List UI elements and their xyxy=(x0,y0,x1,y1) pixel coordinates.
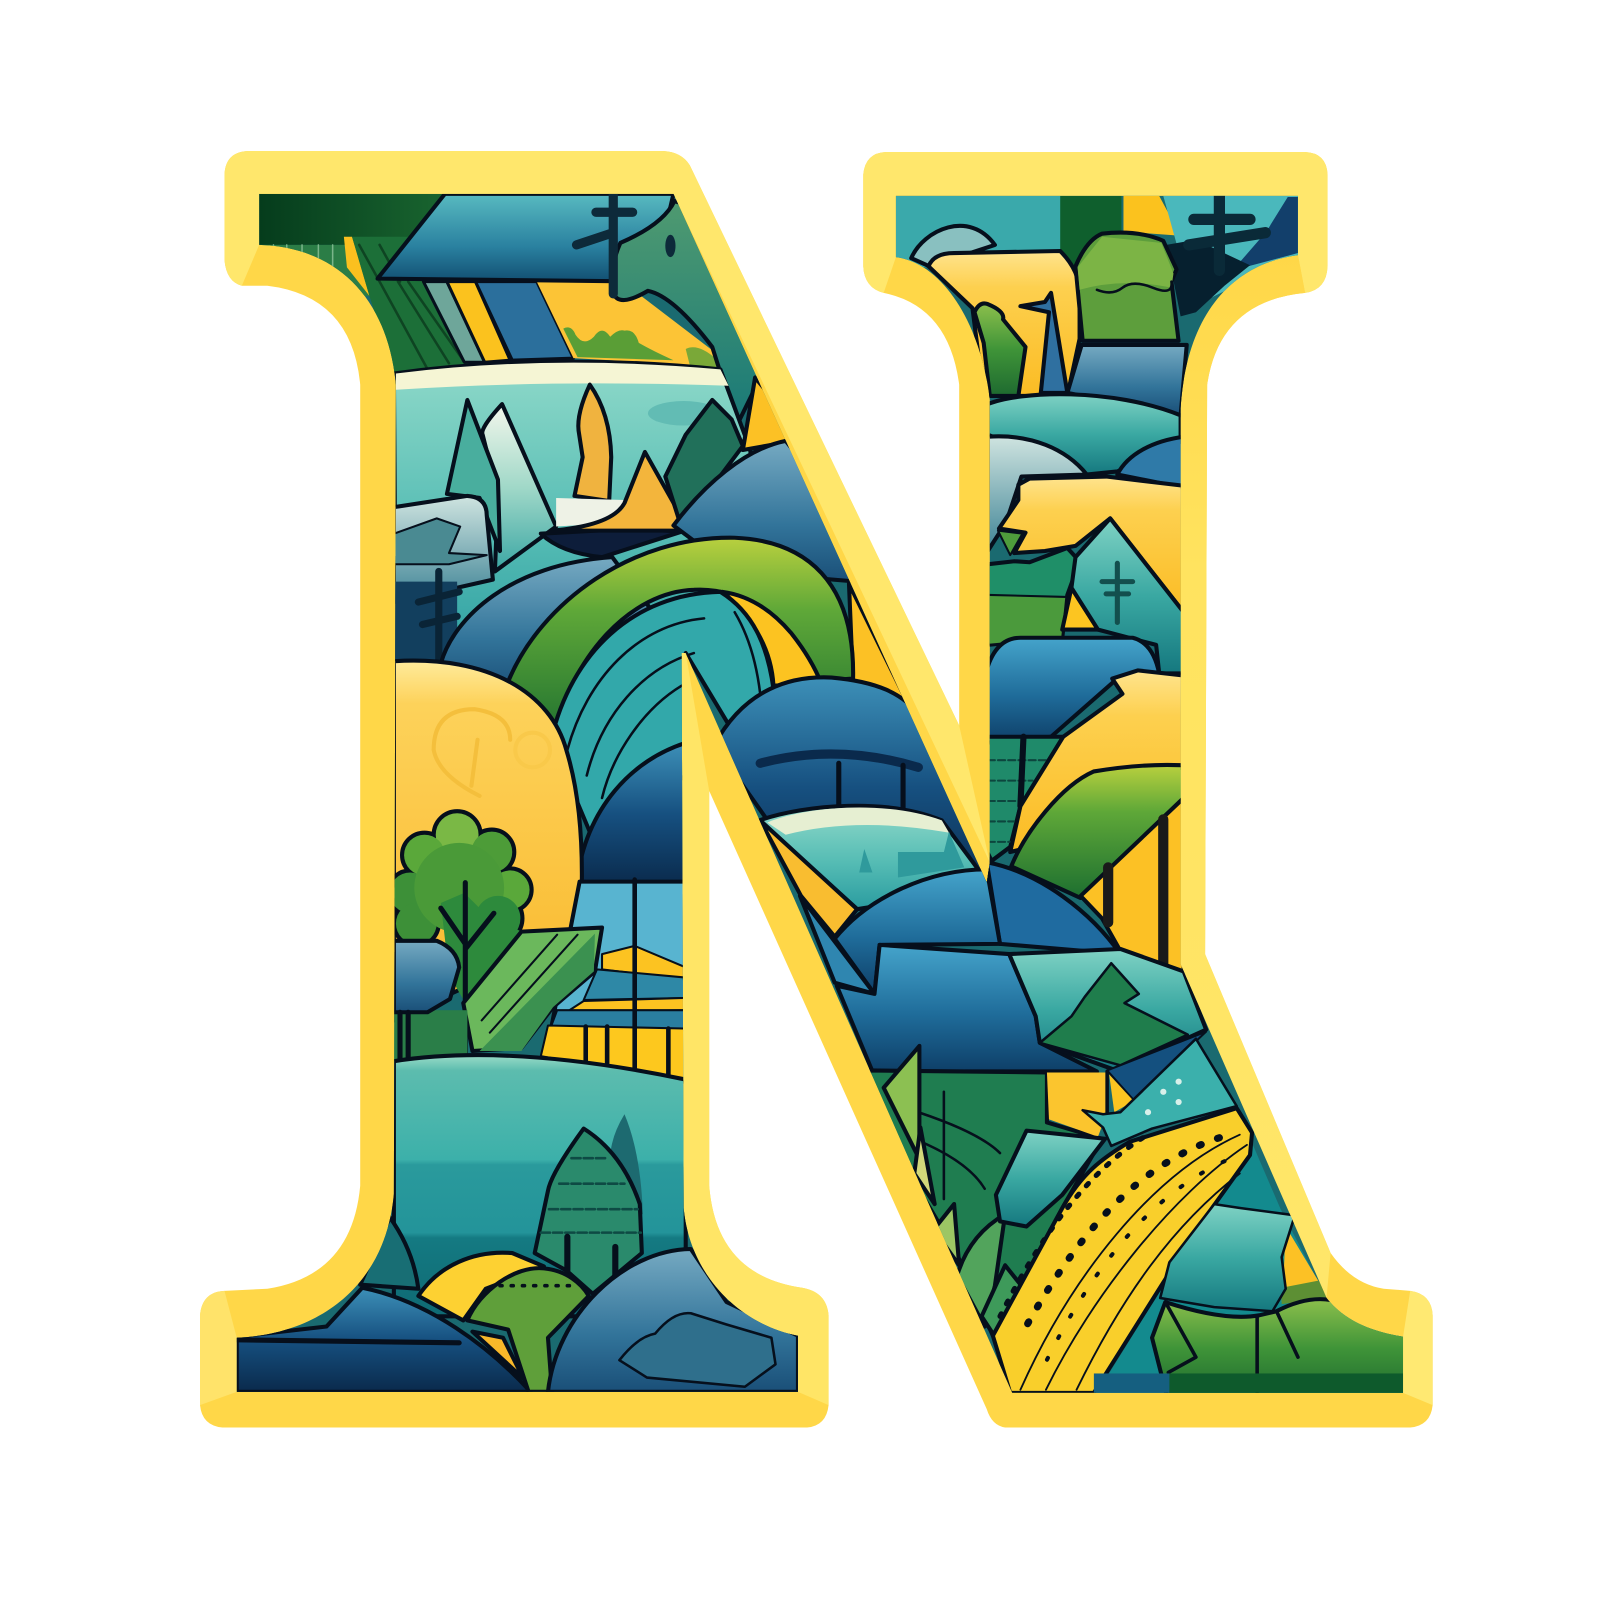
icon: tree xyxy=(390,813,530,1053)
shape: yellow corn xyxy=(993,1108,1252,1393)
shape: green rock right stem xyxy=(988,548,1080,645)
shape: blue pill xyxy=(394,941,467,1061)
shape: teal fish xyxy=(1083,1039,1237,1146)
shape: teal rock xyxy=(996,1131,1105,1227)
shape: dark pine xyxy=(665,400,743,518)
shape: yellow strip beside diagonal xyxy=(741,375,788,452)
shape: bottom-left hill group xyxy=(237,1217,589,1392)
shape: yellow crescent xyxy=(722,592,821,686)
shape: grey dome right stem xyxy=(988,436,1087,551)
shape: teal dome with cream rim xyxy=(759,806,992,909)
panel: right stem top xyxy=(896,196,1298,316)
illustration: decorative letter N xyxy=(200,151,1433,1428)
shape: teal panel with pine xyxy=(1009,949,1206,1100)
shape: blue dome behind xyxy=(583,742,682,880)
shape: yellow panel with poles xyxy=(1081,798,1184,974)
shape: grey rounded box with rock xyxy=(394,496,493,673)
shape: small green triangle xyxy=(998,531,1022,555)
shape: large yellow dome xyxy=(394,661,582,1020)
shape: teal ribbed arches xyxy=(551,592,773,837)
shape: yellow triangle xyxy=(1062,588,1098,630)
shape: jungle background xyxy=(867,1070,1102,1336)
shape: blue rock right stem xyxy=(1067,345,1187,415)
shape: teal hill right stem xyxy=(988,394,1181,474)
icon: scaled tree xyxy=(535,1114,643,1294)
shape: blue dome right stem xyxy=(1117,437,1184,488)
shape: blue hill xyxy=(440,556,650,678)
shape: yellow block lower right stem xyxy=(1010,670,1184,852)
letter frame: yellow bevelled outline xyxy=(200,151,1433,1428)
shape: blue rock xyxy=(673,441,857,582)
shape: tall leaves xyxy=(884,1046,1026,1337)
base fill xyxy=(236,194,1403,1393)
shape: large leaf xyxy=(463,928,602,1051)
scene: landscape inside the letter xyxy=(236,194,1404,1393)
shape: blue dome on diagonal xyxy=(714,677,1010,898)
shape: yellow beside arch xyxy=(849,584,908,704)
shape: cyan dome with bands xyxy=(541,880,686,1082)
panel: lower teal hill xyxy=(394,1055,686,1316)
panel: top-left stripes xyxy=(259,194,735,376)
shape: teal mountain with pine xyxy=(1071,518,1184,673)
shape: teal creature xyxy=(1160,1204,1295,1311)
shape: teal base right xyxy=(1094,1143,1408,1398)
shape: green bush xyxy=(1076,233,1179,341)
shape: big blue domes xyxy=(835,862,1120,994)
shape: lake spires xyxy=(447,385,624,571)
icon: boat xyxy=(541,452,682,557)
shape: yellow block upper right stem xyxy=(929,251,1080,396)
shape: green arch xyxy=(507,536,856,720)
shape: blue top parallelogram xyxy=(378,194,673,282)
shape: big green leaf right stem xyxy=(1011,765,1184,898)
shape: blue panel xyxy=(800,896,1097,1071)
shape: yellow squares xyxy=(1047,1071,1134,1137)
shape: bottom-right green leaves xyxy=(1094,1299,1408,1398)
shape: blue rock middle right stem xyxy=(986,638,1159,743)
shape: yellow block middle right stem xyxy=(999,477,1184,612)
panel: lake with sky xyxy=(394,362,776,673)
shape: yellow wedge on diagonal xyxy=(760,820,857,937)
shape: green leaf and black spire xyxy=(974,293,1067,396)
shape: scaled tree strip xyxy=(986,737,1063,865)
shape: bottom-centre blue hill xyxy=(548,1249,798,1392)
shape: yellow strip right xyxy=(1282,1227,1329,1304)
shape: green rock and dark tree xyxy=(577,194,765,419)
